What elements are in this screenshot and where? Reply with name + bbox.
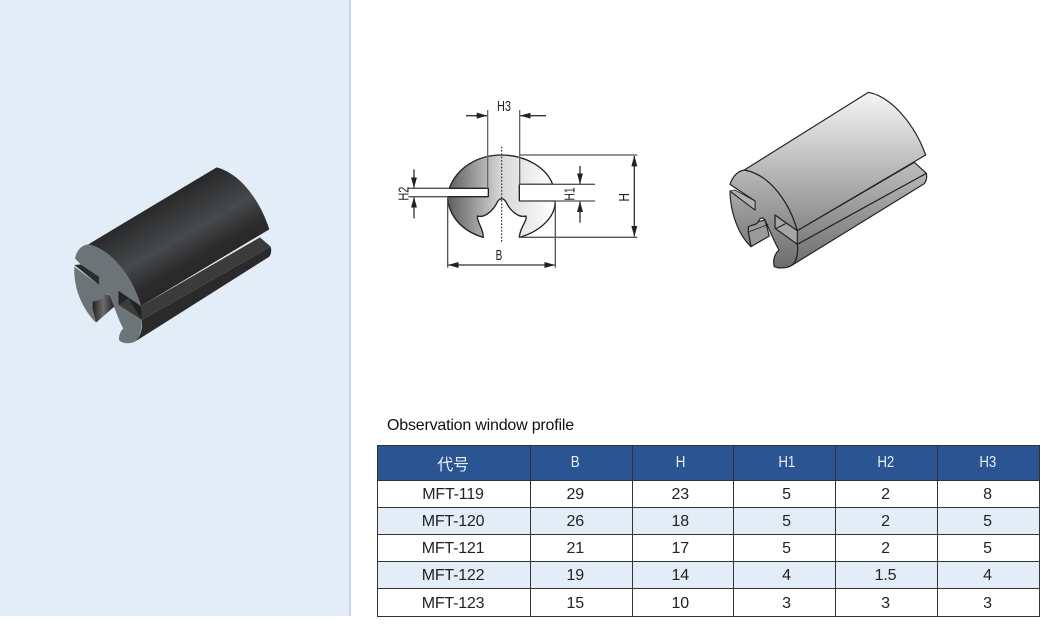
row MFT-122: 14 bbox=[672, 567, 689, 584]
row MFT-119: 23 bbox=[672, 486, 689, 503]
row MFT-121: 2 bbox=[881, 540, 890, 557]
front face of the black profile bbox=[74, 244, 142, 343]
table: dimensions by model bbox=[377, 445, 1040, 617]
row MFT-119 bbox=[422, 486, 992, 503]
center line bbox=[500, 147, 503, 243]
row MFT-121 bbox=[422, 540, 992, 557]
dimension H3: H3 bbox=[497, 99, 511, 115]
row MFT-122: MFT-122 bbox=[422, 567, 484, 584]
row MFT-121: 5 bbox=[782, 540, 791, 557]
row MFT-123 bbox=[422, 594, 992, 612]
dimension H2 bbox=[396, 169, 449, 218]
row MFT-120: 2 bbox=[881, 513, 890, 530]
dimension H1: H1 bbox=[562, 187, 578, 201]
rail of the black profile bbox=[118, 237, 271, 342]
table header row: 代号 bbox=[437, 457, 469, 474]
row MFT-120: MFT-120 bbox=[422, 513, 484, 530]
row MFT-123: MFT-123 bbox=[422, 594, 484, 612]
row MFT-123: 3 bbox=[881, 594, 890, 612]
rail of the line drawing bbox=[775, 162, 927, 265]
table header row: B bbox=[571, 454, 580, 471]
row MFT-120: 5 bbox=[983, 513, 992, 530]
row MFT-122 bbox=[378, 562, 1039, 588]
row MFT-121: 5 bbox=[983, 540, 992, 557]
row MFT-121: 21 bbox=[567, 540, 584, 557]
section shape bbox=[448, 155, 555, 237]
row MFT-121: 17 bbox=[672, 540, 689, 557]
row MFT-120: 5 bbox=[782, 513, 791, 530]
dimension H2: H2 bbox=[396, 187, 412, 201]
row MFT-122: 4 bbox=[782, 567, 791, 584]
dimension H3 bbox=[466, 99, 546, 188]
row MFT-121: MFT-121 bbox=[422, 540, 484, 557]
dimension B bbox=[448, 197, 555, 268]
row MFT-120 bbox=[378, 508, 1039, 534]
row MFT-123: 15 bbox=[567, 594, 584, 612]
front face of the line drawing bbox=[730, 170, 798, 268]
row MFT-120: 26 bbox=[567, 513, 584, 530]
diagram: dimensioned cross section bbox=[396, 99, 637, 268]
dimension H: H bbox=[617, 193, 633, 202]
dimension B: B bbox=[496, 248, 502, 264]
dimension H bbox=[519, 155, 637, 237]
row MFT-119: 29 bbox=[567, 486, 584, 503]
row MFT-123: 10 bbox=[672, 594, 689, 612]
row MFT-120: 18 bbox=[672, 513, 689, 530]
dimension H1 bbox=[519, 166, 595, 223]
cylinder of the line drawing bbox=[744, 92, 926, 231]
table header row: H2 bbox=[877, 454, 894, 471]
row MFT-119: 2 bbox=[881, 486, 890, 503]
table header row: H bbox=[676, 454, 685, 471]
row MFT-119: 8 bbox=[983, 486, 992, 503]
row MFT-122: 4 bbox=[983, 567, 992, 584]
row MFT-123: 3 bbox=[983, 594, 992, 612]
illustration: grey line drawing of profile bbox=[730, 92, 927, 268]
heading: table title: Observation window profile bbox=[387, 417, 574, 434]
row MFT-119: 5 bbox=[782, 486, 791, 503]
cylinder body of the black profile bbox=[88, 167, 269, 306]
table header row bbox=[378, 446, 1039, 612]
row MFT-122: 1.5 bbox=[875, 567, 896, 584]
row MFT-119: MFT-119 bbox=[422, 486, 484, 503]
row MFT-122: 19 bbox=[567, 567, 584, 584]
table header row: H3 bbox=[979, 454, 996, 471]
table header row: H1 bbox=[778, 454, 795, 471]
illustration: black rubber profile bbox=[74, 167, 271, 343]
panel: left product photo background bbox=[0, 0, 351, 616]
row MFT-123: 3 bbox=[782, 594, 791, 612]
